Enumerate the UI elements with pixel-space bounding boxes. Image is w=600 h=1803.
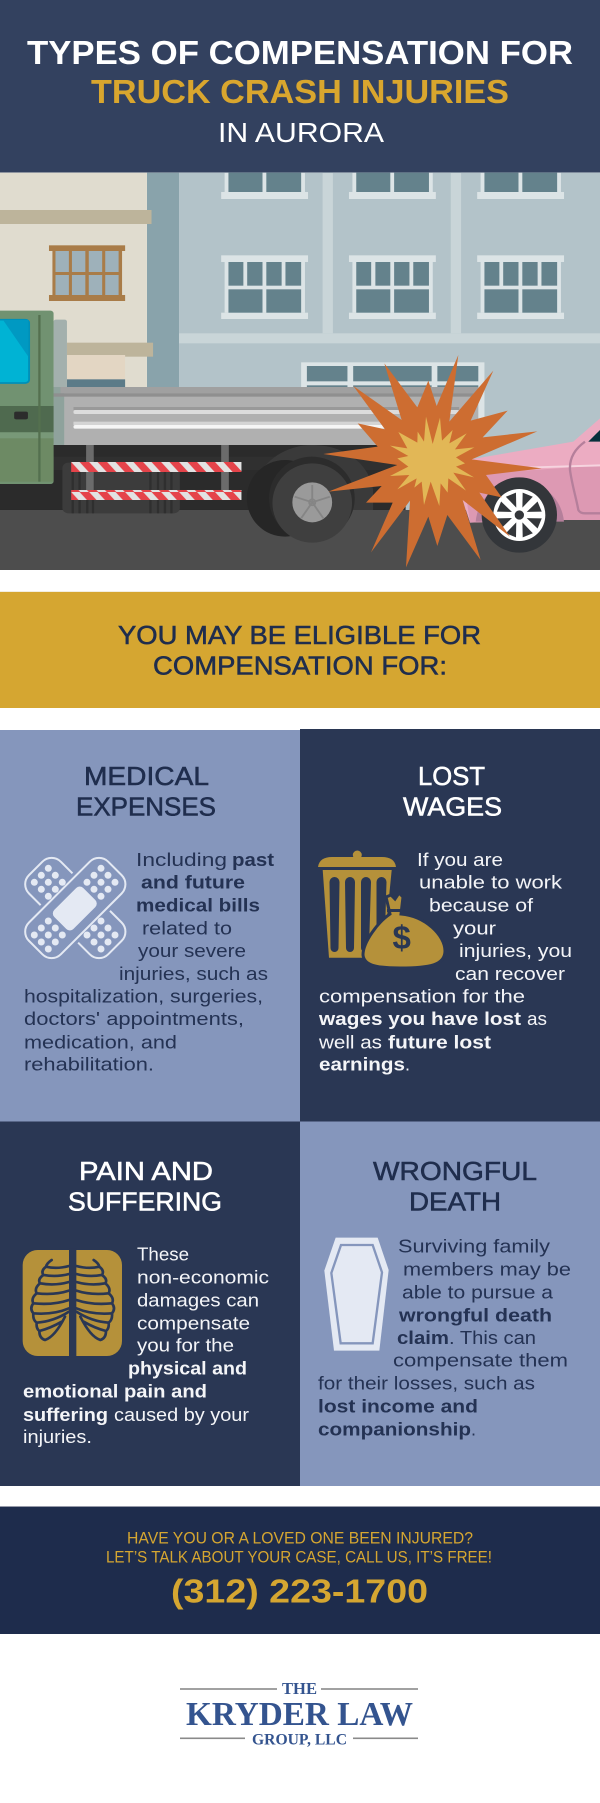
panel: medical expenses [0,730,300,1122]
text: pain and suffering description: emotional pain and [23,1382,207,1402]
text: medical expenses description: medical bills [136,896,260,916]
text: lost wages description: earnings [319,1055,405,1075]
call to action text: LET’S TALK ABOUT YOUR CASE, CALL US, IT’S FREE! [106,1547,492,1566]
text: lost wages description: injuries, you [459,941,572,961]
heading: wrongful death [373,1156,537,1217]
text: medical expenses description: hospitalization, surgeries, [24,987,263,1007]
text: lost wages description: as [527,1009,547,1029]
text: medical expenses description: related to [142,919,232,939]
text: pain and suffering description: damages can [137,1291,259,1311]
text: wrongful death description: companionship [318,1419,471,1439]
heading: pain and suffering: SUFFERING [68,1187,222,1217]
heading: medical expenses [76,761,216,822]
text: pain and suffering description: compensate [137,1314,250,1334]
text: lost wages description: compensation for the [319,987,525,1007]
panel: header [0,0,600,172]
text: pain and suffering description: injuries. [23,1427,92,1447]
title line 3: IN AURORA [218,117,384,148]
text: medical expenses description: Including [136,850,227,870]
text: lost wages description: future lost [388,1032,491,1052]
icon: dollar sign: $ [393,919,411,956]
logo: The Kryder Law Group, LLC [180,1679,418,1749]
text: pain and suffering description: caused by your [114,1405,249,1425]
banner heading [118,620,481,680]
heading: lost wages: WAGES [403,792,502,822]
text: wrongful death description: members may be [403,1260,571,1280]
banner heading: YOU MAY BE ELIGIBLE FOR [118,620,481,650]
text: wrongful death description: able to pursue a [402,1283,554,1303]
text: pain and suffering description: These [137,1245,189,1265]
text: pain and suffering description: you for the [137,1336,234,1356]
panel: wrongful death [300,1122,600,1486]
icon: coffin [324,1238,389,1351]
text: lost wages description: unable to work [419,873,563,893]
text: medical expenses description [24,850,274,1075]
text: wrongful death description: Surviving family [398,1237,550,1257]
text: wrongful death description [318,1237,571,1439]
text: wrongful death description: claim [397,1328,449,1348]
text: wrongful death description: . This can [449,1328,536,1348]
text: pain and suffering description [23,1245,269,1447]
logo: The Kryder Law Group, LLC: THE [282,1679,317,1698]
pink car [463,418,600,553]
heading: medical expenses: MEDICAL [84,761,209,791]
text: medical expenses description: rehabilitation. [24,1055,154,1075]
text: medical expenses description: your severe [138,941,246,961]
text: lost wages description: . [405,1055,410,1075]
logo: The Kryder Law Group, LLC: KRYDER LAW [186,1696,413,1733]
text: wrongful death description: lost income and [318,1396,478,1416]
text: wrongful death description: compensate them [393,1351,568,1371]
text: lost wages description: If you are [417,850,503,870]
explosion [323,355,542,567]
text: wrongful death description: . [471,1419,476,1439]
heading: pain and suffering: PAIN AND [79,1156,213,1186]
text: pain and suffering description: physical and [128,1359,247,1379]
panel: lost wages [300,729,600,1122]
text: pain and suffering description: suffering [23,1405,108,1425]
text: lost wages description: can recover [455,964,565,984]
icon: rib cage [23,1248,122,1358]
title line 2: TRUCK CRASH INJURIES [91,73,509,110]
text: lost wages description [318,850,572,1075]
illustration: truck crash scene [0,173,600,570]
call to action text: HAVE YOU OR A LOVED ONE BEEN INJURED? [127,1528,473,1547]
text: lost wages description: well as [318,1032,382,1052]
heading: pain and suffering [68,1156,222,1217]
panel: call to action [0,1506,600,1634]
call to action text [106,1528,492,1566]
phone number: (312) 223-1700 [171,1573,428,1610]
panel: pain and suffering [0,1122,300,1486]
banner heading: COMPENSATION FOR: [153,650,447,680]
text: medical expenses description: past [232,850,274,870]
text: medical expenses description: and future [141,873,245,893]
text: medical expenses description: injuries, such as [119,964,268,984]
text: lost wages description: because of [429,896,534,916]
text: wrongful death description: for their losses, such as [318,1373,535,1393]
icon: crossed bandages [20,852,131,964]
icon: trash can with money bag [318,850,445,968]
heading: wrongful death: WRONGFUL [373,1156,537,1186]
text: lost wages description: your [453,919,496,939]
logo: The Kryder Law Group, LLC: GROUP, LLC [252,1732,347,1749]
heading: lost wages [403,761,502,822]
text: pain and suffering description: non-economic [137,1268,269,1288]
title line 1: TYPES OF COMPENSATION FOR [27,34,573,71]
text: lost wages description: wages you have lost [318,1009,521,1029]
heading: medical expenses: EXPENSES [76,792,216,822]
text: medical expenses description: doctors' appointments, [24,1009,244,1029]
heading: wrongful death: DEATH [409,1187,501,1217]
panel: eligibility banner [0,592,600,708]
text: medical expenses description: medication, and [24,1032,177,1052]
text: wrongful death description: wrongful death [398,1305,552,1325]
heading: lost wages: LOST [418,761,485,791]
